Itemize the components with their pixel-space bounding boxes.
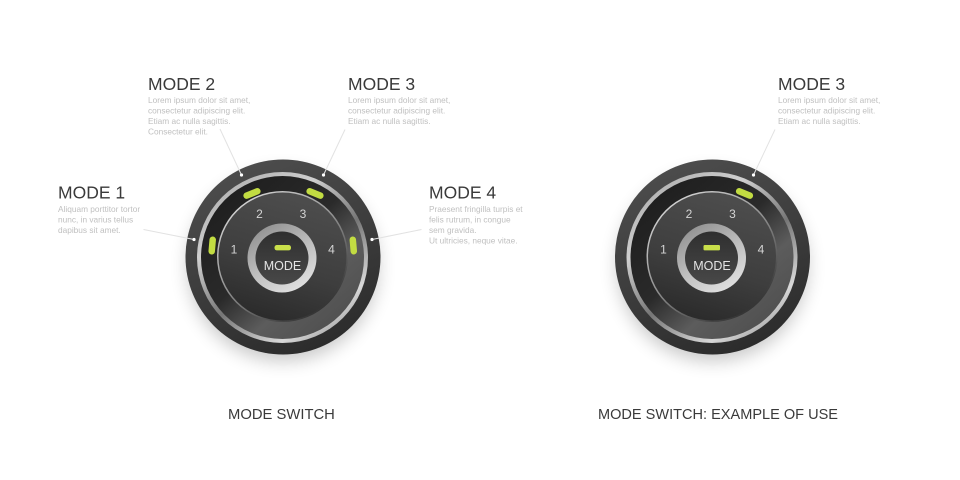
callout: example mode 3: MODE 3 [778, 74, 845, 94]
callout: mode 1: Aliquam porttitor tortor [58, 204, 140, 214]
callout: mode 4: felis rutrum, in congue [429, 214, 511, 224]
callout: example mode 3: Etiam ac nulla sagittis. [778, 116, 861, 126]
callout: mode 4: sem gravida. [429, 225, 476, 235]
callout: mode 4 [370, 182, 523, 246]
callout: mode 3: Lorem ipsum dolor sit amet, [348, 95, 450, 105]
label: MODE: MODE [264, 259, 301, 273]
caption: example of use: MODE SWITCH: EXAMPLE OF USE [598, 407, 838, 423]
indicator: LED 1 [208, 236, 216, 255]
callout: mode 1 [58, 182, 196, 241]
indicator: LED 2 [242, 187, 262, 200]
callout: mode 1: dapibus sit amet. [58, 225, 121, 235]
caption: mode switch: MODE SWITCH [228, 407, 335, 423]
center button [677, 224, 746, 292]
callout: mode 3: consectetur adipiscing elit. [348, 106, 445, 116]
callout: example mode 3: Lorem ipsum dolor sit amet, [778, 95, 880, 105]
callout: mode 2 [148, 74, 250, 177]
number 4: 4 [328, 242, 335, 256]
indicator: LED 3 [305, 187, 325, 200]
indicator: LED 3 [735, 187, 754, 200]
callout: mode 2: consectetur adipiscing elit. [148, 106, 245, 116]
knob: mode switch [186, 160, 380, 361]
center button [248, 224, 316, 292]
callout: mode 1: MODE 1 [58, 182, 125, 202]
callout: mode 3 [322, 74, 450, 177]
callout: mode 4: MODE 4 [429, 182, 496, 202]
label: MODE: MODE [693, 259, 731, 273]
callout: mode 2: Consectetur elit. [148, 126, 208, 136]
number 3: 3 [300, 207, 307, 221]
callout: example mode 3 [752, 74, 880, 177]
number 4: 4 [758, 242, 765, 256]
number 1: 1 [231, 242, 238, 256]
callout: mode 2: Etiam ac nulla sagittis. [148, 116, 231, 126]
callout: mode 4: Ut ultricies, neque vitae. [429, 236, 518, 246]
callout: mode 2: Lorem ipsum dolor sit amet, [148, 95, 250, 105]
number 3: 3 [729, 207, 736, 221]
knob: example of use [615, 160, 810, 361]
callout: example mode 3: consectetur adipiscing elit. [778, 106, 875, 116]
indicator: center LED [704, 245, 720, 250]
number 1: 1 [660, 242, 667, 256]
indicator: center LED [274, 245, 291, 250]
callout: mode 1: nunc, in varius tellus [58, 214, 133, 224]
number 2: 2 [256, 207, 263, 221]
callout: mode 3: Etiam ac nulla sagittis. [348, 116, 431, 126]
callout: mode 2: MODE 2 [148, 74, 215, 94]
callout: mode 4: Praesent fringilla turpis et [429, 204, 523, 214]
indicator: LED 4 [349, 236, 357, 255]
number 2: 2 [686, 207, 693, 221]
callout: mode 3: MODE 3 [348, 74, 415, 94]
